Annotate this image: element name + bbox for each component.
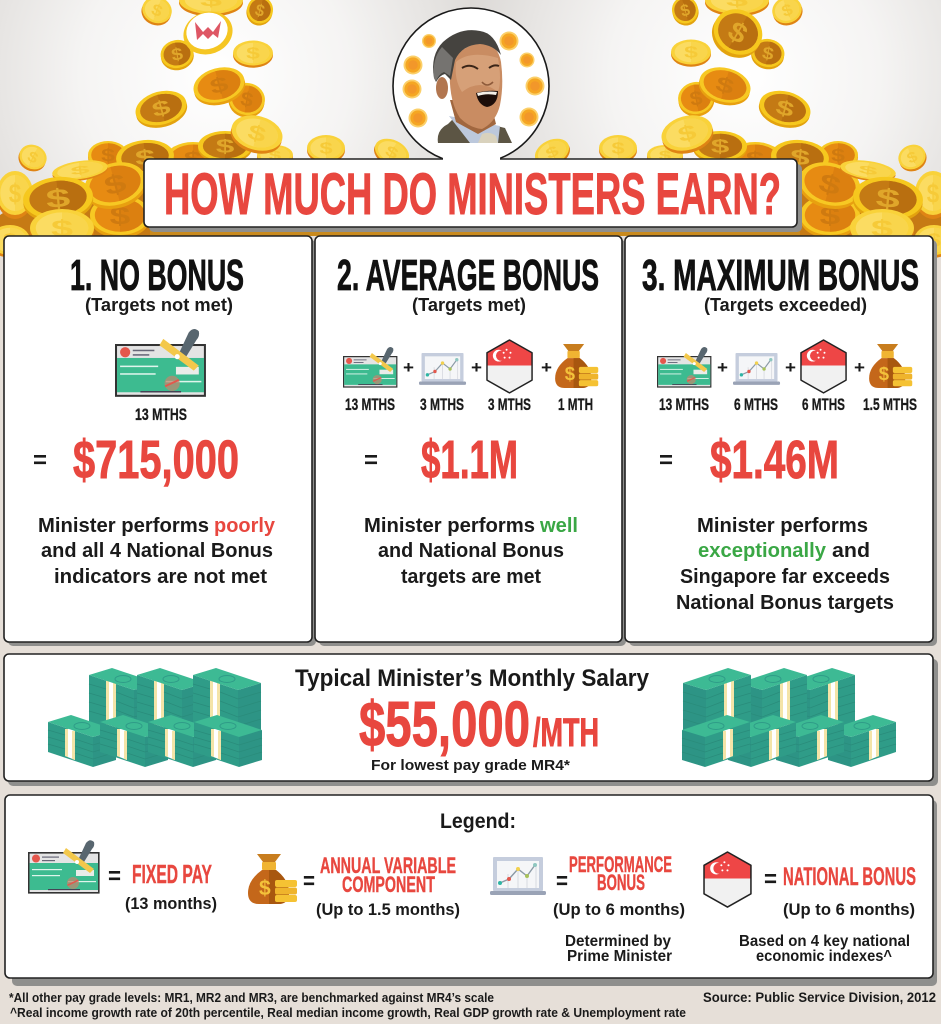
legend item: national bonus: = xyxy=(764,866,777,893)
formula icons: average xyxy=(344,340,598,393)
salary amount: $55,000 xyxy=(359,688,530,760)
logo coin xyxy=(177,5,239,61)
header background with coins xyxy=(0,0,941,258)
legend heading: Legend: xyxy=(440,810,516,833)
description: no bonus: Minister performs xyxy=(38,515,209,537)
description: average bonus: Minister performs xyxy=(364,515,535,537)
legend item: performance bonus: Prime Minister xyxy=(567,948,672,965)
equals sign: = xyxy=(33,447,47,474)
legend item: national bonus: economic indexes^ xyxy=(756,948,892,965)
legend item: annual variable component: (Up to 1.5 months) xyxy=(316,900,460,919)
footnotes: *All other pay grade levels: MR1, MR2 and MR3, are benchmarked against MR4’s scale xyxy=(9,990,494,1005)
formula labels: average: 3 MTHS xyxy=(488,395,531,414)
legend item: national bonus: (Up to 6 months) xyxy=(783,900,915,919)
formula labels: average: 1 MTH xyxy=(558,395,593,414)
footnotes: ^Real income growth rate of 20th percentile, Real median income growth, Real GDP growth rate & Unemployment rate xyxy=(10,1005,686,1020)
formula icons: maximum: + xyxy=(717,358,728,377)
subheading: targets exceeded: (Targets exceeded) xyxy=(704,295,867,315)
footnotes xyxy=(9,990,686,1020)
description: maximum bonus xyxy=(676,515,894,614)
legend item: fixed pay: (13 months) xyxy=(125,894,217,913)
amount: 715000: $715,000 xyxy=(73,430,239,490)
legend item: performance bonus: PERFORMANCE xyxy=(569,852,672,877)
legend item: performance bonus: (Up to 6 months) xyxy=(553,900,685,919)
panel: monthly salary xyxy=(4,654,938,786)
description: no bonus: indicators are not met xyxy=(54,566,267,588)
formula labels: average: 3 MTHS xyxy=(420,395,464,414)
subheading: targets met: (Targets met) xyxy=(412,295,526,315)
equals sign: = xyxy=(364,447,378,474)
description: maximum bonus: Singapore far exceeds xyxy=(680,566,890,588)
formula icons: maximum xyxy=(658,340,912,393)
salary footnote: For lowest pay grade MR4* xyxy=(371,757,570,774)
description: no bonus: poorly xyxy=(214,515,276,537)
icon: money stacks left xyxy=(48,668,262,767)
amount: 1.1M: $1.1M xyxy=(421,430,518,490)
title banner xyxy=(144,156,802,232)
description: average bonus: and National Bonus xyxy=(378,540,564,562)
formula icons: average: + xyxy=(471,358,482,377)
legend item: national bonus: Based on 4 key national xyxy=(739,933,910,950)
description: no bonus xyxy=(38,515,276,588)
panel: no bonus xyxy=(4,236,316,646)
legend item: annual variable component: ANNUAL VARIABLE xyxy=(320,853,456,878)
salary unit: /MTH xyxy=(533,711,599,755)
portrait circle xyxy=(393,8,549,164)
salary heading: Typical Minister’s Monthly Salary xyxy=(295,665,650,692)
formula labels: average xyxy=(345,395,593,414)
formula labels: maximum: 6 MTHS xyxy=(802,395,845,414)
formula labels: maximum: 1.5 MTHS xyxy=(863,395,917,414)
legend item: fixed pay: = xyxy=(108,863,121,890)
banner notch under portrait xyxy=(443,156,500,161)
icon: money stacks right xyxy=(682,668,896,767)
description: maximum bonus: National Bonus targets xyxy=(676,592,894,614)
formula labels: maximum xyxy=(659,395,917,414)
description: average bonus xyxy=(364,515,578,588)
formula icons: maximum: + xyxy=(854,358,865,377)
legend item: performance bonus: BONUS xyxy=(597,870,645,895)
description: maximum bonus: and xyxy=(832,540,870,562)
subheading: targets not met: (Targets not met) xyxy=(85,295,233,315)
description: maximum bonus: Minister performs xyxy=(697,515,868,537)
heading: average bonus: 2. AVERAGE BONUS xyxy=(337,251,599,300)
panel: legend xyxy=(5,795,937,986)
formula icons: maximum: + xyxy=(785,358,796,377)
description: maximum bonus: exceptionally xyxy=(698,540,827,562)
icon: cheque large xyxy=(116,329,205,396)
portrait: laughing man xyxy=(433,30,512,143)
legend item: annual variable component: COMPONENT xyxy=(342,872,435,897)
legend item: performance bonus: Determined by xyxy=(565,933,671,950)
legend item: performance bonus: = xyxy=(556,868,568,895)
heading: no bonus: 1. NO BONUS xyxy=(70,251,244,300)
portrait coins xyxy=(402,32,544,128)
formula labels: average: 13 MTHS xyxy=(345,395,395,414)
amount: 1.46M: $1.46M xyxy=(710,430,839,490)
legend item: annual variable component: = xyxy=(303,868,315,895)
formula icons: average: + xyxy=(541,358,552,377)
equals sign: = xyxy=(659,447,673,474)
legend item: performance bonus xyxy=(490,852,685,965)
description: average bonus: targets are met xyxy=(401,566,541,588)
panel: average bonus xyxy=(315,236,626,646)
legend item: annual variable component xyxy=(248,853,460,919)
panel: maximum bonus xyxy=(625,236,937,646)
description: no bonus: and all 4 National Bonus xyxy=(41,540,273,562)
formula labels: maximum: 13 MTHS xyxy=(659,395,709,414)
legend item: fixed pay xyxy=(29,840,217,913)
description: average bonus: well xyxy=(539,515,578,537)
legend item: national bonus xyxy=(704,852,916,965)
formula icons: average: + xyxy=(403,358,414,377)
source: Source: Public Service Division, 2012 xyxy=(703,990,936,1005)
legend item: fixed pay: FIXED PAY xyxy=(132,859,212,889)
months label: 13 MTHS xyxy=(135,405,187,424)
formula labels: maximum: 6 MTHS xyxy=(734,395,778,414)
